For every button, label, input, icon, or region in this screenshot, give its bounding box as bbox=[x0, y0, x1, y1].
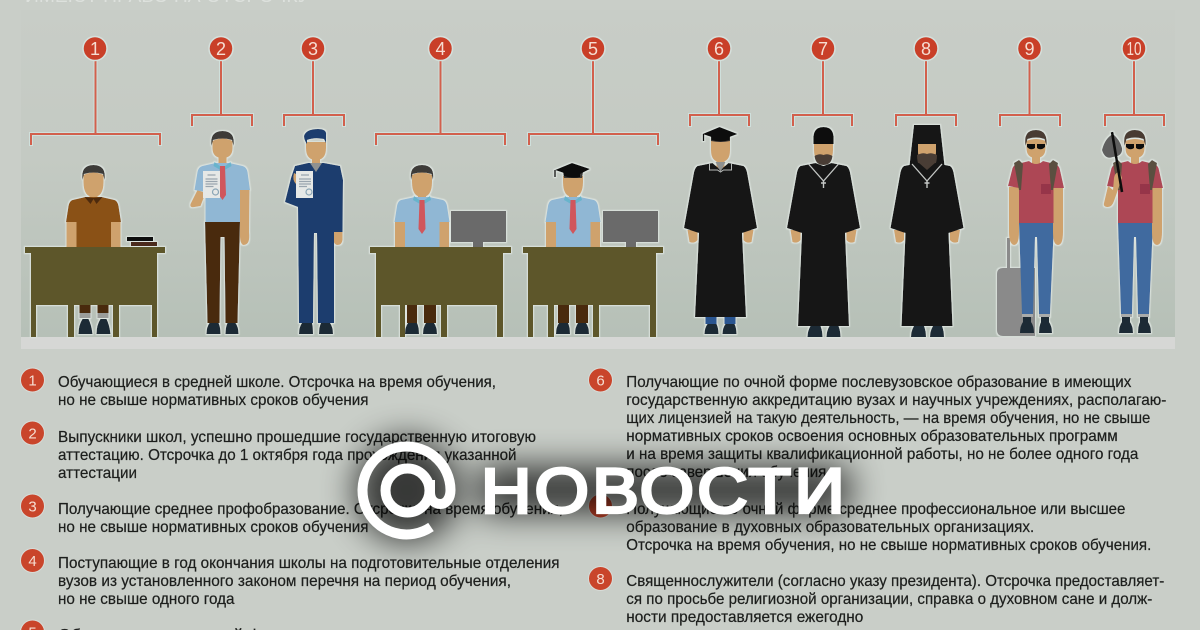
legend item 3: 3 bbox=[28, 498, 37, 516]
legend item 7: Получающие по очной форме среднее профессиональное или высшее bbox=[626, 501, 1125, 518]
legend item 5 bbox=[20, 620, 532, 630]
legend item 6: 6 bbox=[596, 372, 605, 390]
figure 7: priest in black cassock bbox=[787, 127, 860, 337]
number badges row: 8 bbox=[921, 39, 931, 59]
legend item 6: после завершения обучения bbox=[626, 464, 826, 481]
legend item 6: щих лицензией на такую деятельность, — на время обучения, но не свыше bbox=[626, 410, 1150, 427]
number badges row: 7 bbox=[818, 39, 828, 59]
figure 3: vocational student in uniform bbox=[285, 129, 343, 334]
legend item 2: 2 bbox=[28, 426, 37, 442]
legend item 4: 4 bbox=[28, 553, 37, 570]
number badges row: 1 bbox=[90, 39, 100, 59]
illustration panel bbox=[21, 10, 1175, 337]
logo wordmark: НОВОСТИ bbox=[481, 456, 848, 526]
legend item 2: Выпускники школ, успешно прошедшие государственную итоговую bbox=[58, 429, 536, 446]
figure 6: postgraduate in gown bbox=[684, 127, 757, 334]
figure 5: student in mortarboard at desk bbox=[523, 163, 663, 337]
legend item 8: ся по просьбе религиозной организации, справка о духовном сане и долж- bbox=[626, 591, 1152, 608]
legend item 7 bbox=[588, 494, 1151, 554]
legend item 1: Обучающиеся в средней школе. Отсрочка на время обучения, bbox=[58, 374, 496, 391]
legend item 8: 8 bbox=[596, 571, 605, 588]
figure 9: traveller with suitcase bbox=[997, 130, 1064, 336]
numbered callout brackets bbox=[31, 60, 1164, 145]
legend item 8: Священнослужители (согласно указу президента). Отсрочка предоставляет- bbox=[626, 573, 1164, 590]
legend item 6: Получающие по очной форме послевузовское образование в имеющих bbox=[626, 374, 1131, 391]
number badges row: 3 bbox=[308, 39, 318, 59]
number badges row: 10 bbox=[1126, 39, 1142, 59]
legend item 2 bbox=[20, 421, 536, 482]
legend item 6: нормативных сроков освоения основных образовательных программ bbox=[626, 428, 1118, 445]
legend item 7: образование в духовных образовательных организациях. bbox=[626, 519, 1034, 536]
legend item 8: ности предоставляется ежегодно bbox=[626, 609, 863, 626]
logo: @ Новости bbox=[363, 446, 848, 534]
legend item 2: аттестацию. Отсрочка до 1 октября года прохождения указанной bbox=[58, 447, 516, 464]
icon: at sign bbox=[363, 446, 450, 534]
legend item 4: вузов из установленного законом перечня на период обучения, bbox=[58, 573, 511, 590]
legend item 1 bbox=[20, 368, 496, 409]
legend item 8 bbox=[588, 566, 1164, 626]
number badges row: 2 bbox=[216, 39, 226, 59]
legend item 3: Получающие среднее профобразование. Отсрочка на время обучения, bbox=[58, 501, 563, 518]
legend item 6 bbox=[588, 368, 1166, 481]
number badges row: 5 bbox=[588, 39, 598, 59]
number badges row: 9 bbox=[1024, 39, 1035, 59]
number badges row: 4 bbox=[435, 39, 446, 59]
legend item 1: 1 bbox=[28, 372, 37, 390]
figure 10: traveller with bindle bbox=[1102, 130, 1163, 333]
figure 1: schoolboy at desk bbox=[25, 165, 165, 337]
legend item 4: Поступающие в год окончания школы на подготовительные отделения bbox=[58, 555, 560, 572]
floor strip bbox=[21, 337, 1175, 349]
legend item 3 bbox=[20, 494, 563, 536]
figure 2: graduate with certificate bbox=[190, 131, 250, 334]
legend item 1: но не свыше нормативных сроков обучения bbox=[58, 392, 368, 409]
figure 8: monk with hood bbox=[890, 125, 964, 337]
logo shadow bbox=[355, 438, 850, 542]
legend item 7: Отсрочка на время обучения, но не свыше нормативных сроков обучения. bbox=[626, 537, 1151, 554]
legend item 6: государственную аккредитацию вузах и научных учреждениях, располагаю- bbox=[626, 392, 1166, 409]
number badges row bbox=[83, 36, 1146, 60]
legend item 4 bbox=[20, 548, 560, 608]
legend item 2: аттестации bbox=[58, 465, 137, 482]
number badges row: 6 bbox=[714, 39, 724, 59]
legend item 7: 7 bbox=[596, 498, 605, 516]
legend item 6: и на время защиты квалификационной работы, но не более одного года bbox=[626, 446, 1138, 463]
legend item 3: но не свыше нормативных сроков обучения bbox=[58, 519, 368, 536]
figure 4: applicant at desk with monitor bbox=[370, 165, 511, 337]
legend item 4: но не свыше одного года bbox=[58, 591, 235, 608]
